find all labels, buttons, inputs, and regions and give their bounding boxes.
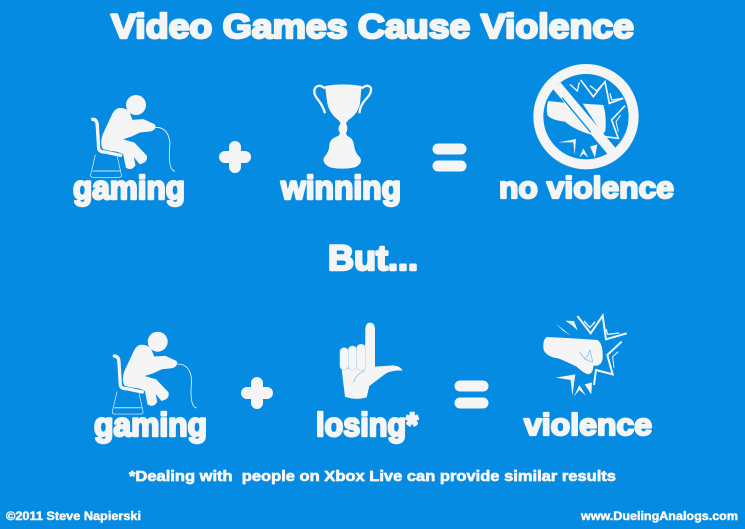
- copyright: ©2011 Steve Napierski: [6, 511, 141, 523]
- But: But...: [328, 239, 418, 278]
- equals top: [438, 149, 461, 166]
- icon: trophy: [314, 84, 371, 169]
- label: losing: losing*: [316, 406, 418, 443]
- label: gaming top: gaming: [73, 169, 185, 206]
- plus bottom: [247, 383, 267, 403]
- label: no violence: no violence: [499, 170, 674, 205]
- label: gaming bottom: gaming: [94, 406, 207, 443]
- label: violence: violence: [524, 407, 652, 442]
- footnote: *Dealing with people on Xbox Live can provide similar results: [129, 468, 616, 485]
- icon: no violence: [538, 69, 634, 164]
- icon: hand L: [340, 323, 403, 399]
- plus top: [225, 147, 245, 167]
- icon: gamer bottom: [112, 332, 197, 414]
- title: Video Games Cause Violence: [111, 8, 634, 46]
- icon: fist violence: [543, 316, 627, 397]
- label: winning: winning: [280, 169, 401, 206]
- equals bottom: [460, 386, 483, 403]
- icon: gamer top: [91, 95, 175, 177]
- website: www.DuelingAnalogs.com: [580, 511, 738, 523]
